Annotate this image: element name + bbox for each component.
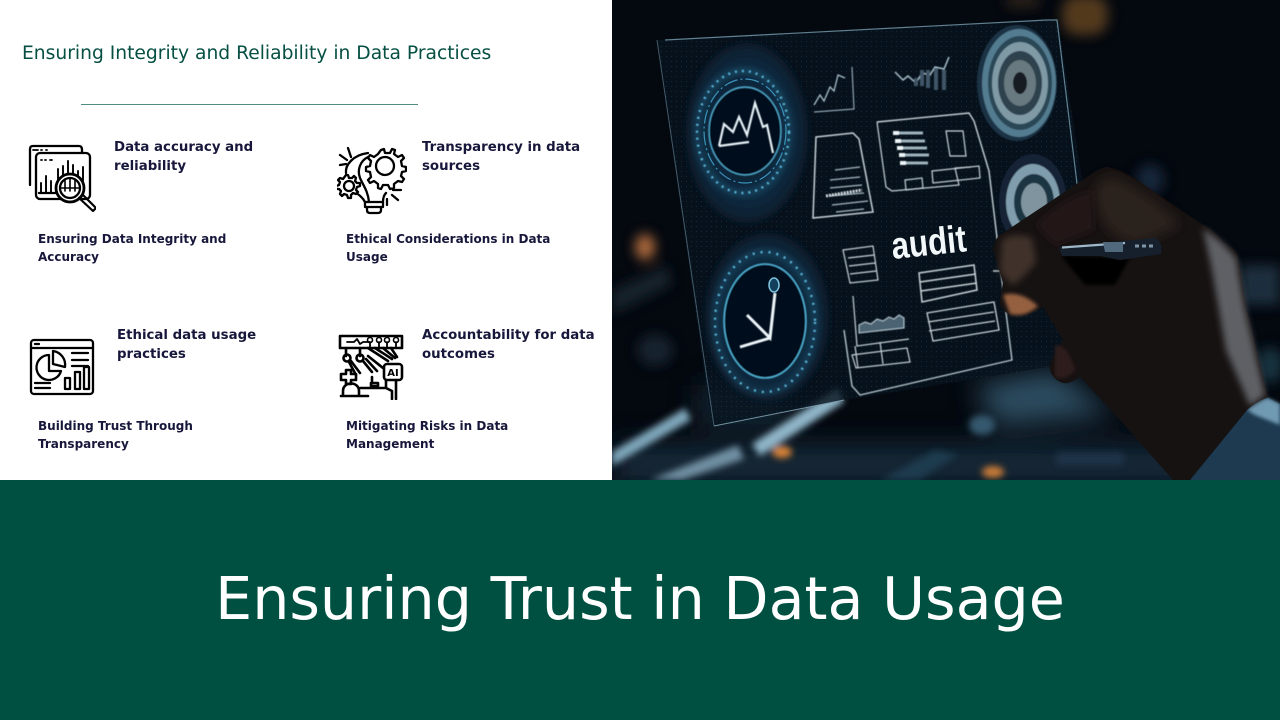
- main title: Ensuring Trust in Data Usage: [215, 565, 1065, 633]
- label: transparency heading: [422, 140, 580, 174]
- footer band with main title: [0, 480, 1280, 720]
- label: transparency heading: Transparency in data: [422, 140, 580, 155]
- text: transparency description: Usage: [346, 250, 388, 264]
- holographic panel: [657, 20, 1090, 427]
- photo: hand auditing a holographic data screen: [612, 0, 1280, 480]
- icon: light bulb with gears: [337, 146, 407, 214]
- background bokeh: [612, 0, 1280, 383]
- label: ethical usage heading: practices: [117, 347, 186, 362]
- text: ethical usage description: Building Trust Through: [38, 419, 193, 433]
- label: transparency heading: sources: [422, 159, 480, 174]
- word: audit on screen: audit: [889, 218, 969, 268]
- label: data accuracy heading: reliability: [114, 159, 186, 174]
- icon: dashboard with pie and bars: [30, 338, 94, 396]
- document blocks: [813, 113, 1012, 395]
- gauge: rising line top left: [686, 43, 808, 223]
- label: ethical usage heading: Ethical data usage: [117, 328, 256, 343]
- panel: ethical usage: [30, 328, 256, 451]
- icon: AI circuit board: AI: [387, 368, 399, 379]
- panel: transparency: [337, 140, 580, 264]
- text: accountability description: Mitigating Risks in Data: [346, 419, 508, 433]
- text: accountability description: [346, 419, 508, 451]
- dial: top right: [977, 25, 1057, 141]
- gauge: dip and rise bottom left: [705, 233, 829, 401]
- label: ethical usage heading: [117, 328, 256, 362]
- text: data accuracy description: Ensuring Data Integrity and: [38, 232, 226, 246]
- label: accountability heading: outcomes: [422, 347, 495, 362]
- icon: chart under magnifying glass: [28, 144, 96, 212]
- text: transparency description: Ethical Considerations in Data: [346, 232, 550, 246]
- label: data accuracy heading: Data accuracy and: [114, 140, 253, 155]
- text: data accuracy description: Accuracy: [38, 250, 99, 264]
- text: transparency description: [346, 232, 550, 264]
- label: data accuracy heading: [114, 140, 253, 174]
- label: accountability heading: Accountability for data: [422, 328, 595, 343]
- icon: AI circuit board: [338, 334, 404, 400]
- text: ethical usage description: [38, 419, 193, 451]
- text: ethical usage description: Transparency: [38, 437, 129, 451]
- panel: data accuracy: [28, 140, 253, 264]
- heading: slide subtitle: Ensuring Integrity and Reliability in Data Practices: [22, 43, 491, 64]
- text: accountability description: Management: [346, 437, 434, 451]
- text: data accuracy description: [38, 232, 226, 264]
- hand holding pen: [993, 167, 1280, 480]
- label: accountability heading: [422, 328, 595, 362]
- sparklines: [814, 57, 949, 112]
- panel: accountability: [338, 328, 595, 451]
- dial: middle right: [999, 154, 1067, 250]
